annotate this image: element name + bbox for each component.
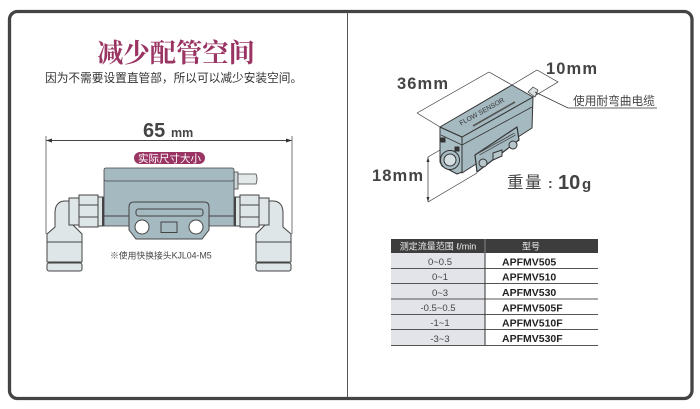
dimension: 10mm: 10mm	[546, 60, 598, 78]
side face	[462, 97, 533, 173]
top face	[440, 85, 533, 137]
model names: APFMV505F	[502, 302, 563, 314]
weight: :	[548, 175, 553, 191]
dimension: 36mm: 36mm	[397, 75, 449, 93]
mounting plate	[129, 202, 209, 239]
dimension: 10mm	[512, 60, 598, 97]
markers	[441, 138, 445, 142]
flow range values: -3~3	[430, 334, 450, 345]
model names	[502, 256, 563, 345]
product marking: FLOW SENSOR	[459, 97, 506, 127]
plate window	[493, 150, 502, 160]
fitting note: ※使用快换接头KJL04-M5	[110, 250, 212, 260]
lid seam	[441, 107, 532, 145]
panel: right, dimensions and models	[372, 60, 657, 346]
model names: APFMV530F	[502, 333, 563, 345]
dimension: 18mm	[372, 150, 477, 202]
flow range values: 0~3	[432, 288, 448, 299]
flow range values: -0.5~0.5	[420, 303, 456, 314]
left fitting	[47, 195, 103, 271]
mounting plate	[475, 127, 519, 172]
flow range values	[420, 257, 456, 345]
sensor body	[104, 168, 234, 226]
weight	[507, 172, 591, 194]
model table	[391, 239, 598, 346]
table header: 型号	[522, 242, 540, 252]
cable	[234, 172, 257, 189]
title: 减少配管空间	[97, 39, 255, 68]
model names: APFMV510	[502, 272, 556, 284]
weight: 重量	[507, 173, 543, 192]
panel divider	[346, 12, 348, 397]
isometric sensor drawing	[440, 85, 538, 174]
cable end	[528, 87, 538, 97]
dimension: 18mm: 18mm	[372, 167, 424, 185]
model names: APFMV530	[502, 287, 556, 299]
plate slot	[479, 134, 515, 154]
table header: 测定流量范围 ℓ/min	[400, 240, 476, 252]
sensor front view with fittings	[47, 168, 291, 271]
width dimension: 65 mm	[46, 120, 292, 234]
table header	[391, 239, 598, 253]
port	[440, 150, 460, 170]
callout: flexible cable: 使用耐弯曲电缆	[573, 94, 655, 108]
model names: APFMV505	[502, 256, 556, 268]
width dimension: 65 mm: 65	[143, 120, 165, 142]
width dimension: 65 mm: mm	[171, 126, 193, 140]
subtitle: 因为不需要设置直管部，所以可以减少安装空间。	[45, 71, 302, 85]
flow range values: 0~1	[432, 272, 448, 283]
dimension: 36mm	[397, 72, 512, 127]
model names: APFMV510F	[502, 318, 563, 330]
weight: 10	[558, 172, 580, 194]
top groove	[473, 102, 515, 126]
actual size badge: 实际尺寸大小	[138, 152, 201, 165]
flow range values: 0~0.5	[428, 257, 452, 268]
plate holes	[479, 159, 487, 167]
callout: flexible cable	[535, 92, 657, 108]
weight: g	[582, 176, 591, 193]
front face	[440, 127, 462, 174]
table rows	[391, 253, 598, 346]
flow range values: -1~1	[430, 318, 450, 329]
panel: left, reduced piping space	[45, 39, 302, 271]
right fitting	[235, 195, 291, 271]
flow range column	[391, 253, 485, 345]
